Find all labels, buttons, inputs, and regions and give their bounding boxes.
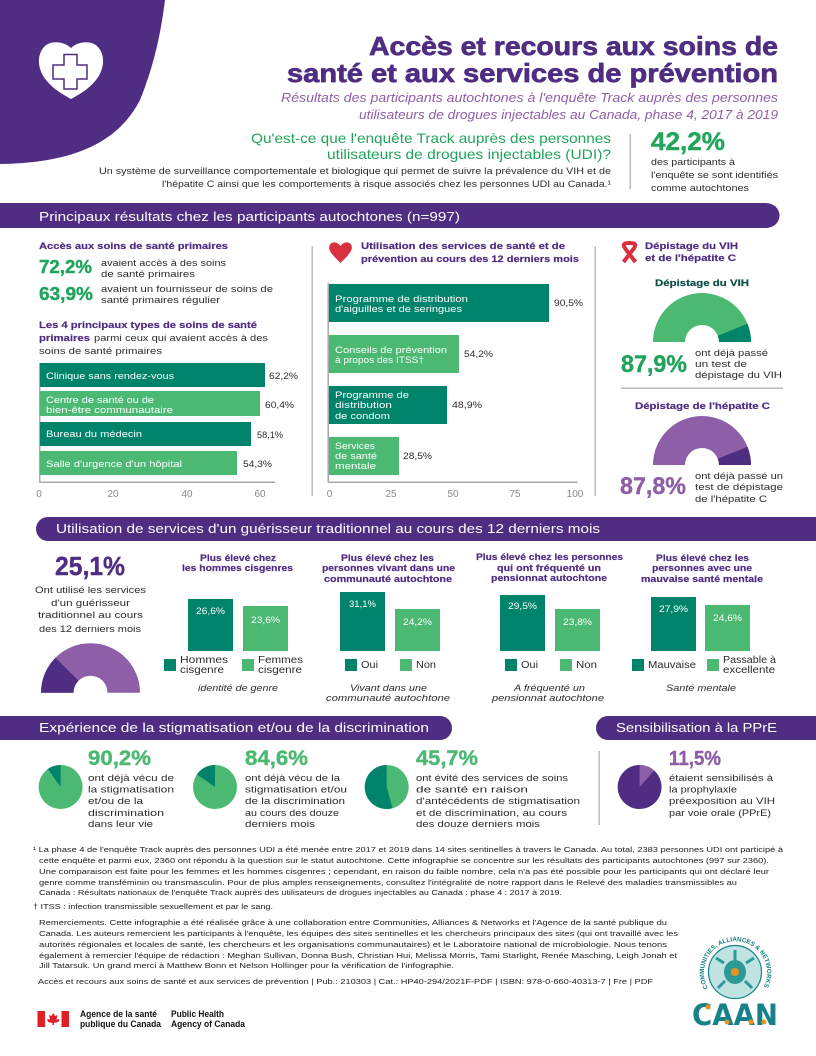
text: la stigmatisation [88, 784, 174, 796]
legend: Femmes [258, 655, 303, 666]
heading: personnes vivant dans une [322, 563, 455, 574]
bar chart: primary care types: bien-être communautaire [46, 405, 173, 416]
heading [182, 553, 293, 574]
bar chart: primary care types: Clinique sans rendez-vous [46, 371, 174, 382]
text: discrimination [88, 808, 164, 819]
text: ont évité des services de soins [416, 773, 568, 784]
caption: Vivant dans une [350, 683, 427, 694]
stat: 87,9%: ont déjà passé [695, 348, 768, 359]
bar chart: primary care types [36, 363, 299, 500]
stat: 63,9% [39, 284, 273, 306]
bar chart: primary care types: Centre de santé ou de [46, 395, 154, 406]
survey description: l'hépatite C ainsi que les comportements à risque associés chez les personnes UDI au Canada.¹ [162, 179, 611, 190]
logo: CAAN [692, 936, 778, 1032]
bar chart: services [327, 283, 584, 500]
heading: qui ont fréquenté un [497, 563, 601, 574]
stat: 87,8%: test de dépistage [695, 482, 783, 493]
stat: 25,1% healer use: d'un guérisseur [51, 598, 130, 609]
stat: 72,2%: 72,2% [39, 257, 92, 277]
text: au cours des douze [245, 808, 339, 819]
heading: testing: et de l'hépatite C [645, 253, 736, 264]
icon: red ribbon [624, 243, 636, 262]
heading: primary care: Accès aux soins de santé primaires [39, 241, 228, 252]
heading [476, 552, 623, 584]
gauge: hepatitis C 87,8% [653, 416, 751, 465]
banner: key results [0, 203, 780, 228]
heading: Plus élevé chez les personnes [476, 552, 623, 563]
legend [505, 659, 597, 671]
stat: 87,8%: 87,8% [620, 473, 686, 500]
bar chart: services: Programme de [335, 390, 409, 401]
text: et/ou de la [88, 796, 144, 807]
gauge: HIV 87,9% [653, 293, 751, 342]
logo: Public Health Agency of Canada: Agence de la santé [80, 1009, 157, 1020]
stat: 42,2% identified as Indigenous: des participants à [651, 157, 736, 168]
bar chart: services: 0 [327, 489, 333, 500]
stat: 72,2%: avaient accès à des soins [101, 258, 226, 269]
heading: Plus élevé chez les [341, 553, 434, 564]
bar chart: services: 100 [567, 489, 584, 500]
stat: 87,9%: 87,9% [621, 351, 687, 378]
heading [322, 553, 455, 585]
heading: testing [645, 241, 738, 264]
acknowledgements: également à remercier l'équipe de rédaction : Meghan Sullivan, Donna Bush, Christian Hui, Melissa Morris, Tami Starlight, Renée Masching, Leigh Jonah et [39, 951, 678, 960]
bars: 23,8% [563, 617, 593, 628]
title: Accès et recours aux soins de [369, 31, 778, 61]
text: préexposition au VIH [669, 796, 775, 807]
bar chart: primary care types: 54,3% [243, 459, 273, 470]
bars: 26,6% [196, 606, 226, 617]
heading: hepatitis C testing: Dépistage de l'hépatite C [635, 401, 770, 412]
stat: 11,5% PrEP awareness [618, 748, 775, 819]
logo: Public Health Agency of Canada: Agency of Canada [171, 1019, 246, 1030]
stat: 45,7% avoided services [365, 747, 580, 830]
stat: 25,1% healer use [35, 551, 146, 635]
stat: 87,9%: dépistage du VIH [695, 370, 782, 381]
text: dans leur vie [88, 819, 153, 830]
acknowledgements: Remerciements. Cette infographie a été réalisée grâce à une collaboration entre Communities, Alliances & Networks et l'Agence de la santé publique du [39, 918, 667, 927]
footnotes: Canada : Résultats nationaux de l'enquête Track auprès des utilisateurs de drogues injectables au Canada : phase 4 : 2017 à 2019. [39, 888, 562, 897]
bar chart: primary care types: Bureau du médecin [46, 429, 142, 440]
text: par voie orale (PPrE) [669, 808, 771, 819]
title: santé et aux services de prévention [287, 58, 778, 88]
heading: Plus élevé chez [200, 553, 276, 564]
footnotes: ¹ La phase 4 de l'enquête Track auprès des personnes UDI a été menée entre 2017 et 2019 dans 14 sites sentinelles à travers le Canada. Au total, 2383 personnes UDI ont participé à [33, 845, 784, 854]
text [88, 747, 174, 830]
legend [164, 655, 303, 676]
subtitle: Résultats des participants autochtones à l'enquête Track auprès des personnes [281, 91, 778, 105]
heading: Plus élevé chez les [656, 553, 749, 564]
survey description: Un système de surveillance comportementale et biologique qui permet de suivre la prévalence du VIH et de [99, 166, 611, 177]
legend: Hommes [180, 655, 228, 666]
stat: 72,2% [39, 257, 226, 280]
heading: top 4 care types [39, 320, 268, 357]
text: 45,7% [416, 747, 478, 770]
text [245, 747, 347, 830]
banner: traditional healer: Utilisation de services d'un guérisseur traditionnel au cours des 12 derniers mois [56, 521, 601, 536]
bar chart: services: distribution [335, 400, 392, 411]
acknowledgements: Accès et recours aux soins de santé et aux services de prévention | Pub.: 210303 | Cat.: HP40-294/2021F-PDF | ISBN: 978-0-660-40313-7 | Fre | PDF [38, 977, 653, 986]
acknowledgements: Canada. Les auteurs remercient les participants à l'enquête, les équipes des sites sentinelles et les chercheurs principaux des sites (qui ont travaillé avec les [39, 929, 678, 938]
bar chart: services: Services [335, 441, 375, 452]
caption: A fréquenté un [513, 683, 585, 694]
text: et de discrimination, au cours [416, 808, 567, 819]
banner: key results: Principaux résultats chez les participants autochtones (n=997) [39, 209, 460, 224]
panel: HIV and hepatitis C testing [620, 241, 783, 505]
stat: 42,2% identified as Indigenous: l'enquête se sont identifiés [651, 170, 778, 181]
stat: 63,9%: avaient un fournisseur de soins de [101, 284, 273, 295]
bar chart: primary care types: 62,2% [269, 371, 299, 382]
stat: 25,1% healer use: Ont utilisé les services [35, 585, 146, 596]
legend: cisgenre [180, 665, 224, 676]
bar chart: primary care types: 40 [181, 489, 193, 500]
bars: 31,1% [349, 599, 377, 610]
stat: 25,1% healer use: traditionnel au cours [38, 610, 143, 621]
text: des douze derniers mois [416, 819, 540, 830]
logo: Public Health Agency of Canada: Public Health [171, 1009, 224, 1020]
stat: 87,8%: ont déjà passé un [695, 471, 783, 482]
question heading: Qu'est-ce que l'enquête Track auprès des personnes [251, 130, 611, 146]
stat: 42,2% identified as Indigenous [651, 128, 778, 194]
bar chart: services: 75 [509, 489, 521, 500]
logo: Public Health Agency of Canada: publique du Canada [80, 1019, 162, 1030]
heading: testing: Dépistage du VIH [645, 241, 738, 252]
caption: Santé mentale [666, 683, 736, 694]
emblem: turtle circle: COMMUNITIES, ALLIANCES & NETWORKS [700, 936, 772, 990]
text: 84,6% [245, 747, 308, 770]
banner: traditional healer [36, 517, 816, 541]
legend: Non [576, 660, 597, 671]
heading: services used: prévention au cours des 12 derniers mois [361, 254, 579, 265]
bar chart: services: à propos des ITSS† [335, 355, 424, 366]
text [669, 748, 775, 819]
footnotes: Une comparaison est faite pour les femmes et les hommes cisgenres ; cependant, en raison du faible nombre, cela n'a pas été possible pour les participants qui ont déclaré leur [39, 867, 770, 876]
legend: Oui [521, 660, 538, 671]
icon: heart with medical cross [39, 42, 103, 99]
bars: 23,6% [251, 615, 281, 626]
heading: top 4 care types: soins de santé primaires [39, 346, 162, 357]
text: ont déjà vécu de la [245, 773, 341, 784]
subtitle [281, 91, 778, 122]
heading: communauté autochtone [324, 574, 452, 585]
legend: Non [416, 660, 436, 671]
subtitle: utilisateurs de drogues injectables au Canada, phase 4, 2017 à 2019 [359, 108, 778, 122]
legend: excellente [723, 665, 776, 676]
banner: stigma [0, 716, 452, 740]
heading [641, 553, 763, 585]
text: derniers mois [245, 819, 315, 830]
caption: identité de genre [198, 683, 278, 694]
bar chart: services: 48,9% [452, 400, 483, 411]
banner: PrEP: Sensibilisation à la PPrE [616, 720, 777, 735]
text: de santé en raison [416, 784, 528, 796]
bars [340, 592, 440, 651]
stat: 25,1% healer use: 25,1% [55, 551, 125, 581]
heading: mauvaise santé mentale [641, 574, 763, 585]
text: ont déjà vécu de [88, 773, 174, 784]
survey description [99, 166, 611, 190]
stat: 25,1% healer use: des 12 derniers mois [39, 624, 141, 635]
panel: primary care access [36, 241, 299, 500]
footnotes: genre comme transféminin ou transmasculin. Pour de plus amples renseignements, consultez l'intégralité de notre rapport dans le Relevé des maladies transmissibles au [39, 878, 737, 887]
legend [632, 655, 776, 676]
bar chart: services: 90,5% [554, 298, 584, 309]
legend [345, 659, 436, 671]
bars: 27,9% [659, 604, 689, 615]
caption [326, 683, 450, 704]
caption: communauté autochtone [326, 693, 450, 704]
stat: 87,9%: un test de [695, 359, 747, 370]
icon: Canadian flag [38, 1011, 69, 1027]
banner: PrEP [596, 716, 816, 740]
heading: personnes avec une [652, 563, 752, 574]
pie [365, 765, 409, 809]
bar chart: services: Programme de distribution [335, 294, 468, 305]
stat: 72,2%: de santé primaires [101, 269, 195, 280]
bar chart: primary care types: 0 [36, 489, 42, 500]
chart: mental health [632, 553, 776, 694]
acknowledgements: autorités régionales et locales de santé, les chercheurs et les organisations communautaires) et le Laboratoire national de microbiologie. Nous tenons [39, 940, 667, 949]
bar chart: services: 50 [447, 489, 459, 500]
stat: 87,9% [621, 348, 782, 381]
text: stigmatisation et/ou [245, 784, 347, 796]
gauge: healer 25,1% [41, 643, 140, 693]
heading: pensionnat autochtone [491, 573, 607, 584]
bar chart: primary care types: 60,4% [265, 400, 295, 411]
stat: 63,9%: 63,9% [39, 284, 93, 304]
bars [500, 595, 600, 651]
question heading [251, 130, 611, 162]
chart: living in Indigenous community [322, 553, 455, 704]
heading: HIV testing: Dépistage du VIH [655, 278, 749, 289]
heading: services used [361, 241, 579, 265]
panel: health and prevention services [327, 241, 584, 500]
bar chart: services: 28,5% [403, 451, 433, 462]
logo: Public Health Agency of Canada [38, 1009, 246, 1030]
text: étaient sensibilisés à [669, 773, 774, 784]
bars: 29,5% [508, 601, 538, 612]
stat: 87,8% [620, 471, 783, 505]
title [287, 31, 778, 88]
caption: pensionnat autochtone [491, 693, 604, 704]
bar chart: primary care types: 58,1% [257, 430, 284, 441]
pie [39, 765, 83, 809]
text [416, 747, 580, 830]
stat: 87,8%: de l'hépatite C [695, 494, 767, 505]
pie [193, 765, 237, 809]
acknowledgements [38, 918, 678, 986]
acknowledgements: Jill Tatarsuk. Un grand merci à Matthew Bonn et Nelson Hollinger pour la vérification de l'infographie. [39, 961, 454, 970]
legend: Passable à [723, 655, 776, 666]
bar chart: services: mentale [335, 461, 376, 472]
stat: 84,6% stigma past year [193, 747, 347, 830]
footnotes: † ITSS : infection transmissible sexuellement et par le sang. [33, 902, 273, 911]
bars: 24,2% [403, 617, 433, 628]
stat: 42,2% identified as Indigenous: 42,2% [651, 128, 725, 156]
bar chart: services: de santé [335, 451, 377, 462]
legend: cisgenre [258, 665, 302, 676]
header corner shape [0, 0, 165, 164]
bar chart: primary care types: 60 [254, 489, 266, 500]
text: de la discrimination [245, 796, 345, 807]
pie [618, 765, 662, 809]
stat: 90,2% stigma lifetime [39, 747, 174, 830]
heading: top 4 care types: parmi ceux qui avaient accès à des [94, 333, 268, 344]
bar chart: services: de condom [335, 411, 390, 422]
heading: services used: Utilisation des services de santé et de [361, 241, 565, 252]
heading: top 4 care types: primaires [39, 333, 90, 344]
bar chart: services: Conseils de prévention [335, 345, 447, 356]
bars: 24,6% [713, 613, 743, 624]
wordmark: CAAN [692, 998, 778, 1032]
caption [491, 683, 604, 704]
text: 11,5% [669, 748, 721, 770]
bar chart: services: 54,2% [464, 349, 494, 360]
chart: gender identity [164, 553, 303, 694]
heading: top 4 care types: Les 4 principaux types de soins de santé [39, 320, 257, 331]
bar chart: services: d'aiguilles et de seringues [335, 304, 462, 315]
banner: stigma: Expérience de la stigmatisation et/ou de la discrimination [39, 720, 429, 735]
question heading: utilisateurs de drogues injectables (UDI)? [327, 146, 611, 162]
text: d'antécédents de stigmatisation [416, 796, 580, 807]
heading: les hommes cisgenres [182, 563, 293, 574]
legend: Oui [361, 660, 378, 671]
stat: 63,9%: santé primaires régulier [101, 295, 220, 306]
text: la prophylaxie [669, 784, 737, 796]
legend: Mauvaise [648, 660, 696, 671]
chart: attended residential school [476, 552, 623, 704]
footnotes [33, 845, 784, 911]
icon: red heart [329, 242, 352, 263]
bar chart: primary care types: 20 [107, 489, 119, 500]
text: 90,2% [88, 747, 151, 770]
footnotes: cette enquête et parmi eux, 2360 ont répondu à la question sur le statut autochtone. Cette infographie se concentre sur les résultats des participants autochtones (997 sur 2360). [39, 856, 769, 865]
bars [188, 599, 288, 651]
bars [651, 597, 750, 651]
bar chart: primary care types: Salle d'urgence d'un hôpital [46, 459, 182, 470]
bar chart: services: 25 [385, 489, 397, 500]
stat: 42,2% identified as Indigenous: comme autochtones [651, 183, 749, 194]
